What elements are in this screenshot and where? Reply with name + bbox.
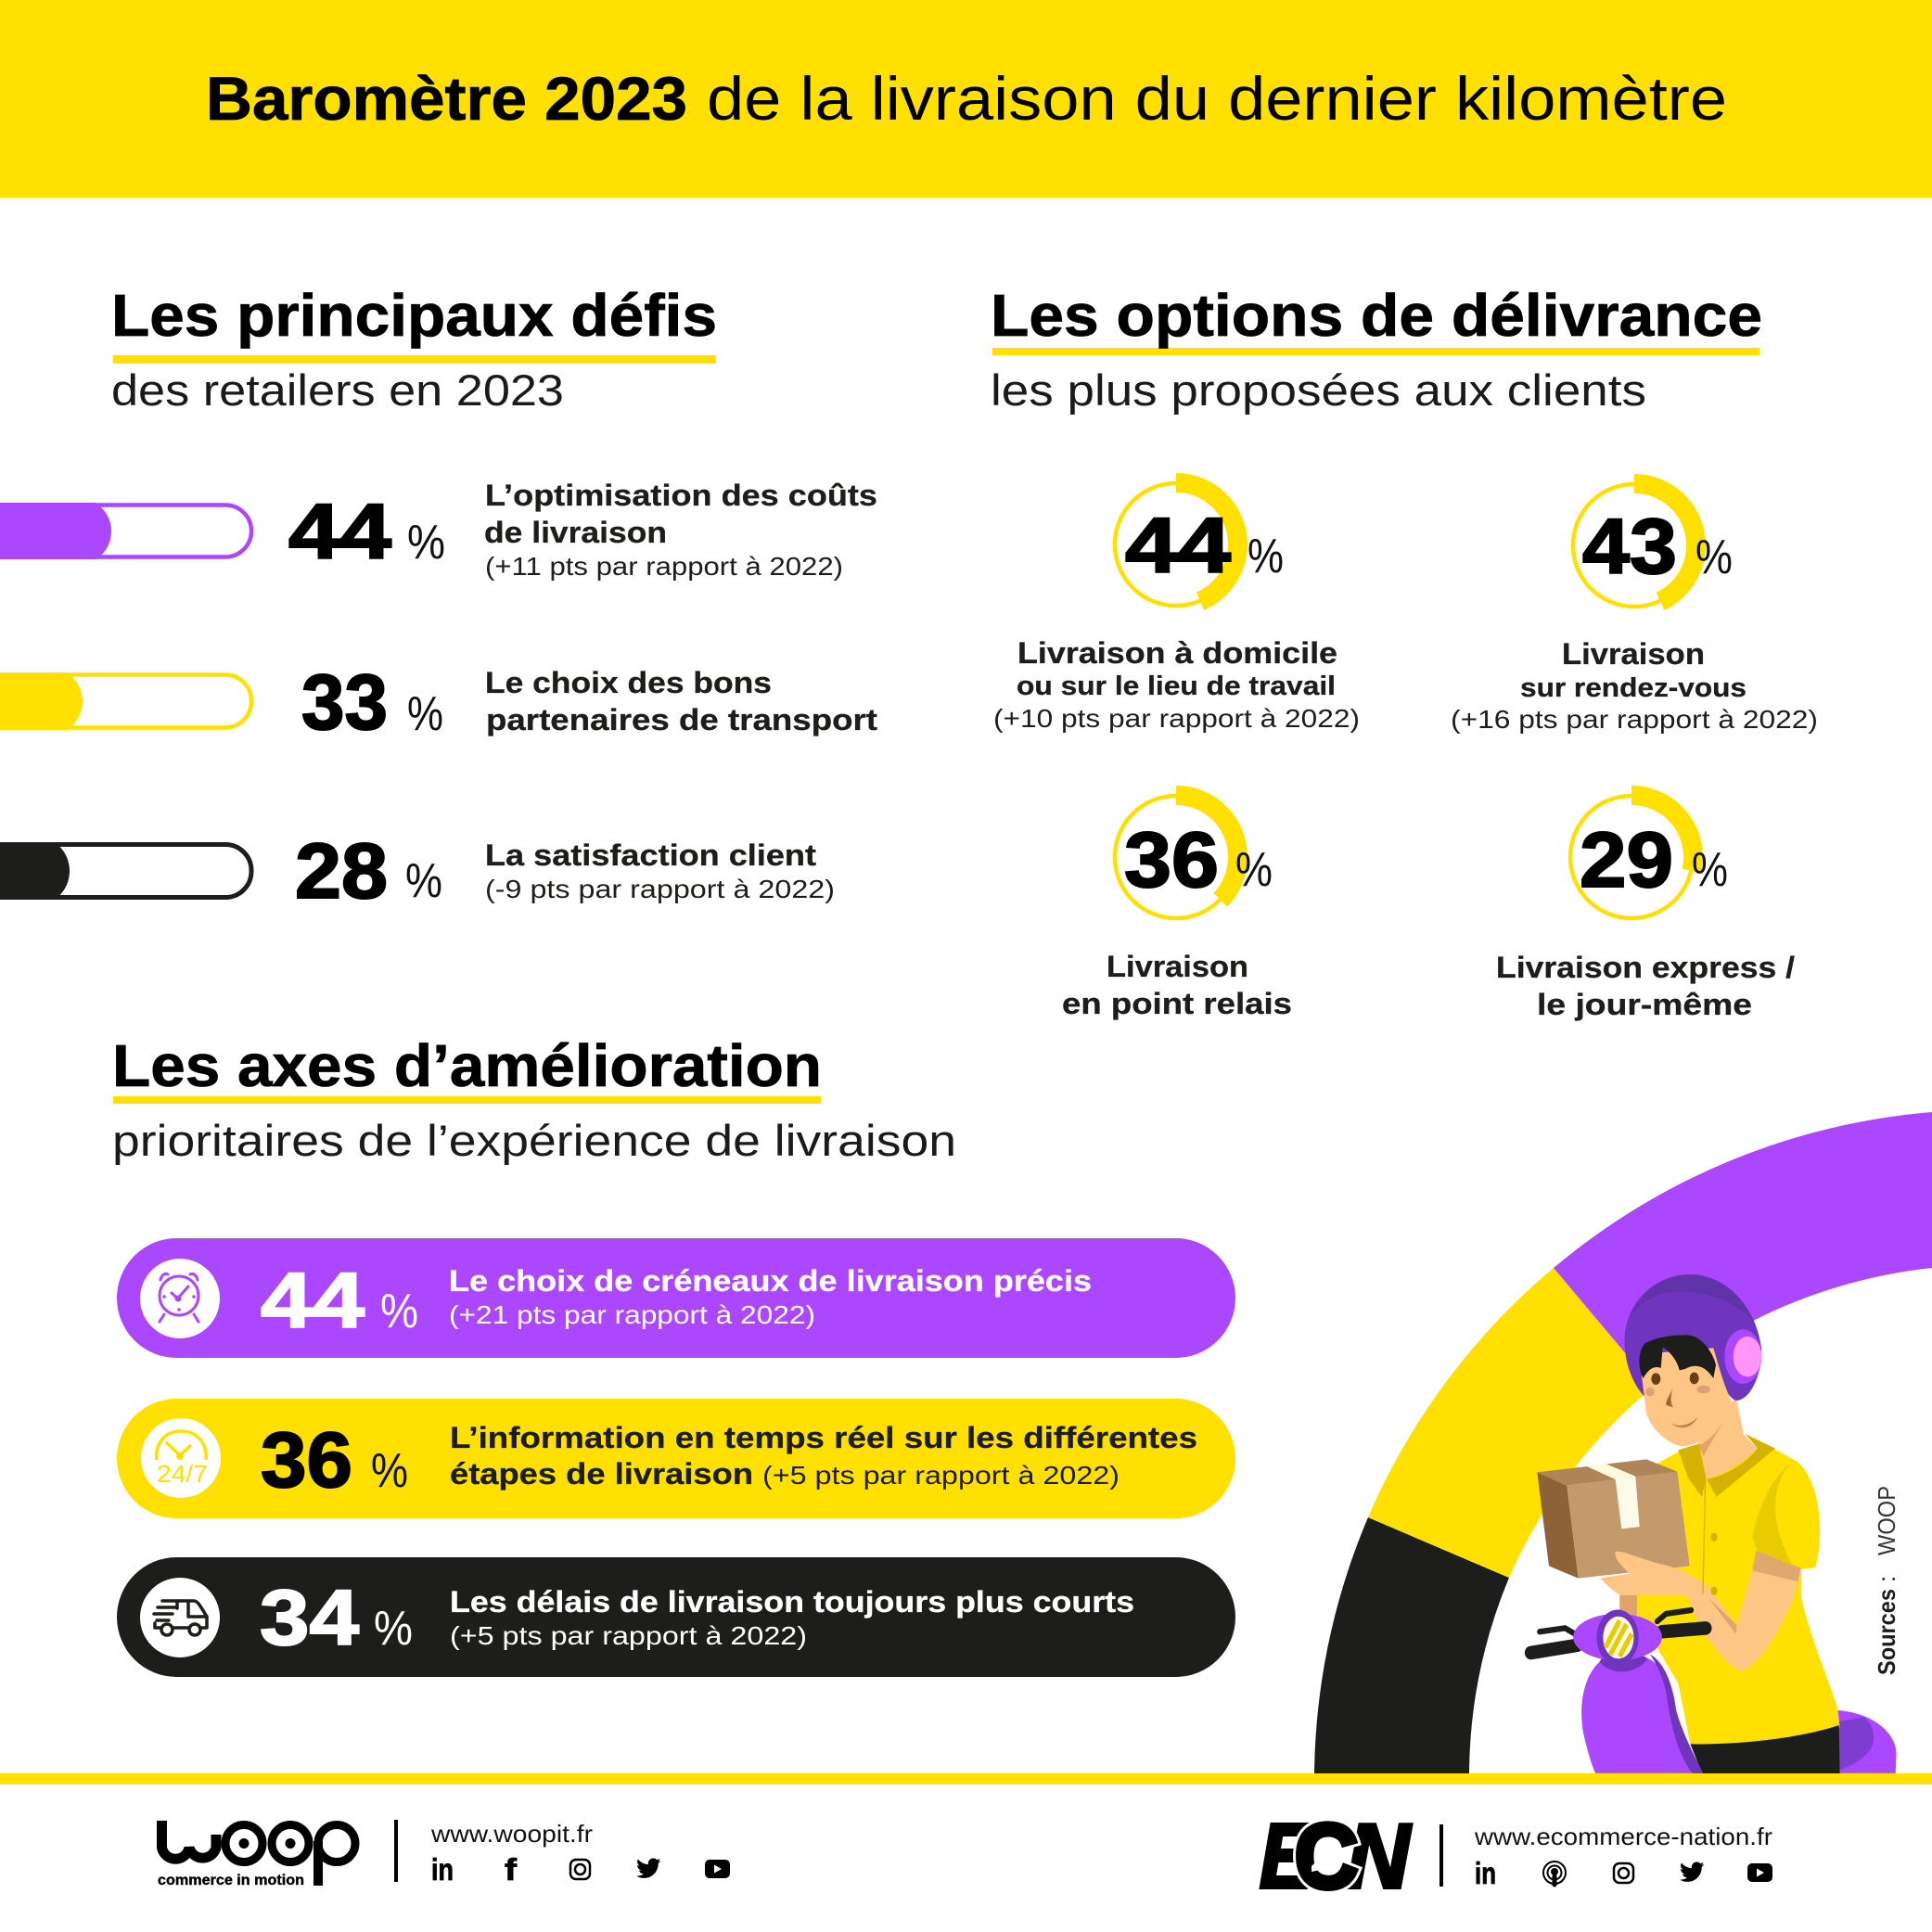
icon: podcast: [1543, 1862, 1566, 1885]
divider: [394, 1820, 398, 1882]
donut 44%: 44: [1125, 502, 1231, 589]
heading: axes d'amélioration: [112, 1032, 956, 1165]
header banner: [0, 0, 1932, 198]
icon: youtube: [705, 1860, 730, 1878]
logo: ecn: N: [1347, 1805, 1412, 1907]
donut 36%: %: [1235, 843, 1273, 897]
illustration: delivery rider on scooter: [1530, 1274, 1897, 1774]
text: information temps réel: [450, 1421, 1197, 1491]
text: information temps réel: étapes de livraison: [450, 1457, 753, 1491]
label: rendez-vous: (+16 pts par rapport à 2022): [1451, 705, 1818, 734]
text: délais: [450, 1585, 1134, 1650]
stat 34%: 34: [260, 1574, 359, 1661]
title: Baromètre 2023: [206, 64, 687, 133]
stat 44%: 44: [288, 488, 391, 575]
heading: options de délivrance: les plus proposées aux clients: [991, 365, 1646, 415]
label: domicile: (+10 pts par rapport à 2022): [993, 704, 1360, 733]
donut 43%: 43: [1582, 503, 1677, 590]
heading: principaux défis: [111, 282, 717, 415]
heading: axes d'amélioration: prioritaires de l’expérience de livraison: [112, 1116, 956, 1165]
text: satisfaction client: La satisfaction client: [485, 838, 816, 872]
stat 36%: [261, 1416, 408, 1503]
icon: truck: [140, 1578, 220, 1657]
stat 44%: [288, 488, 445, 575]
icon: facebook: f: [505, 1852, 518, 1887]
tricolour arc: [1314, 1112, 1932, 1773]
stat 36%: %: [371, 1444, 408, 1498]
label: domicile: Livraison à domicile: [1017, 636, 1337, 670]
text: information temps réel: L’information en temps réel sur les différentes: [450, 1421, 1197, 1454]
panel: principaux défis: [0, 282, 877, 915]
stat 33%: [301, 659, 443, 746]
text: créneaux: (+21 pts par rapport à 2022): [449, 1300, 815, 1329]
title: de la livraison du dernier kilomètre: [707, 64, 1727, 133]
woop links: [430, 1820, 730, 1887]
text: optimisation des coûts: (+11 pts par rapport à 2022): [485, 552, 843, 581]
donut 36%: [1115, 796, 1273, 918]
text: optimisation des coûts: L’optimisation des coûts: [485, 479, 877, 512]
stat 44%: 44: [261, 1257, 365, 1344]
stat 33%: %: [407, 687, 443, 741]
label: point relais: Livraison: [1107, 950, 1248, 983]
logo: woop: commerce in motion: [158, 1873, 304, 1888]
icon: 24/7: 24/7: [157, 1460, 208, 1488]
icon: instagram: [570, 1860, 590, 1879]
stat 34%: [260, 1574, 413, 1661]
progress bar 33%: [0, 672, 251, 730]
stat 28%: [295, 827, 442, 915]
stat 33%: 33: [301, 659, 388, 746]
title: [206, 64, 1727, 133]
text: satisfaction client: [485, 838, 835, 903]
text: partenaires de transport: Le choix des bons: [485, 666, 772, 699]
logo: ecn: E: [1260, 1805, 1315, 1907]
text: satisfaction client: (-9 pts par rapport à 2022): [485, 875, 835, 903]
label: domicile: ou sur le lieu de travail: [1017, 672, 1336, 701]
text: délais: Les délais de livraison toujours plus courts: [450, 1585, 1134, 1619]
source note: Sources: [1873, 1589, 1900, 1675]
panel: axes d'amélioration: [112, 1032, 1235, 1677]
panel: options de délivrance: [991, 282, 1818, 1021]
donut 44%: %: [1247, 530, 1284, 583]
progress bar 44%: [0, 503, 251, 559]
icon: linkedin: in: [431, 1852, 454, 1887]
label: rendez-vous: sur rendez-vous: [1520, 673, 1746, 703]
divider: [1439, 1824, 1443, 1887]
heading: options de délivrance: [991, 282, 1762, 415]
heading: axes d'amélioration: Les axes d’amélioration: [112, 1032, 822, 1099]
heading: options de délivrance: Les options de délivrance: [991, 282, 1762, 349]
heading: principaux défis: Les principaux défis: [111, 282, 717, 349]
stat 44%: %: [407, 516, 445, 569]
label: express: [1496, 951, 1795, 1021]
text: optimisation des coûts: de livraison: [484, 516, 667, 549]
stat 36%: 36: [261, 1416, 352, 1503]
icon: linkedin: in: [1475, 1856, 1496, 1890]
donut 29%: [1570, 796, 1728, 918]
icon: 24/7: [141, 1418, 221, 1498]
stat 28%: 28: [295, 827, 388, 915]
pill: délais: [117, 1557, 1235, 1677]
label: point relais: [1062, 950, 1292, 1020]
label: express: le jour-même: [1537, 988, 1752, 1021]
text: optimisation des coûts: [484, 479, 877, 581]
source note: :: [1873, 1576, 1900, 1582]
icon: twitter: [1680, 1862, 1704, 1882]
logo: ecn: C: [1295, 1805, 1358, 1907]
label: rendez-vous: [1451, 637, 1818, 734]
text: délais: (+5 pts par rapport à 2022): [450, 1621, 807, 1650]
icon: twitter: [636, 1858, 660, 1878]
pill: information temps réel: [117, 1399, 1235, 1518]
donut 36%: 36: [1124, 816, 1219, 903]
text: partenaires de transport: partenaires de transport: [486, 703, 877, 736]
progress bar 28%: [0, 842, 251, 900]
stat 28%: %: [405, 854, 442, 908]
footer rule: [0, 1773, 1932, 1785]
donut 43%: [1573, 484, 1733, 607]
icon: instagram: [1614, 1863, 1633, 1883]
logo: ecn: C: [1295, 1805, 1358, 1907]
logo: ecn: [1260, 1805, 1412, 1907]
label: express: Livraison express /: [1496, 951, 1795, 984]
label: rendez-vous: Livraison: [1562, 637, 1705, 671]
woop links: www.woopit.fr: [430, 1820, 593, 1848]
logo: woop: [158, 1821, 355, 1888]
text: information temps réel: (+5 pts par rapport à 2022): [762, 1461, 1120, 1490]
donut 43%: %: [1695, 531, 1733, 584]
pill: créneaux: [117, 1238, 1235, 1358]
stat 44%: [261, 1257, 418, 1344]
heading: principaux défis: des retailers en 2023: [111, 365, 564, 415]
text: créneaux: Le choix de créneaux de livraison précis: [449, 1264, 1092, 1298]
source note: [1873, 1486, 1900, 1675]
text: partenaires de transport: [485, 666, 877, 736]
ecn links: [1474, 1823, 1772, 1890]
label: point relais: en point relais: [1062, 987, 1292, 1020]
icon: alarm clock: [140, 1259, 220, 1338]
source note: WOOP: [1873, 1486, 1900, 1555]
donut 29%: 29: [1580, 816, 1673, 903]
donut 44%: [1115, 482, 1284, 606]
rider lower body and scooter: [1530, 1450, 1897, 1774]
donut 29%: %: [1692, 843, 1728, 897]
stat 44%: %: [380, 1285, 418, 1338]
rider upper body, head and parcel: [1537, 1274, 1801, 1595]
text: créneaux: [449, 1264, 1092, 1329]
ecn links: www.ecommerce-nation.fr: [1474, 1823, 1772, 1850]
icon: youtube: [1747, 1863, 1772, 1882]
label: domicile: [993, 636, 1360, 733]
stat 34%: %: [374, 1602, 413, 1656]
